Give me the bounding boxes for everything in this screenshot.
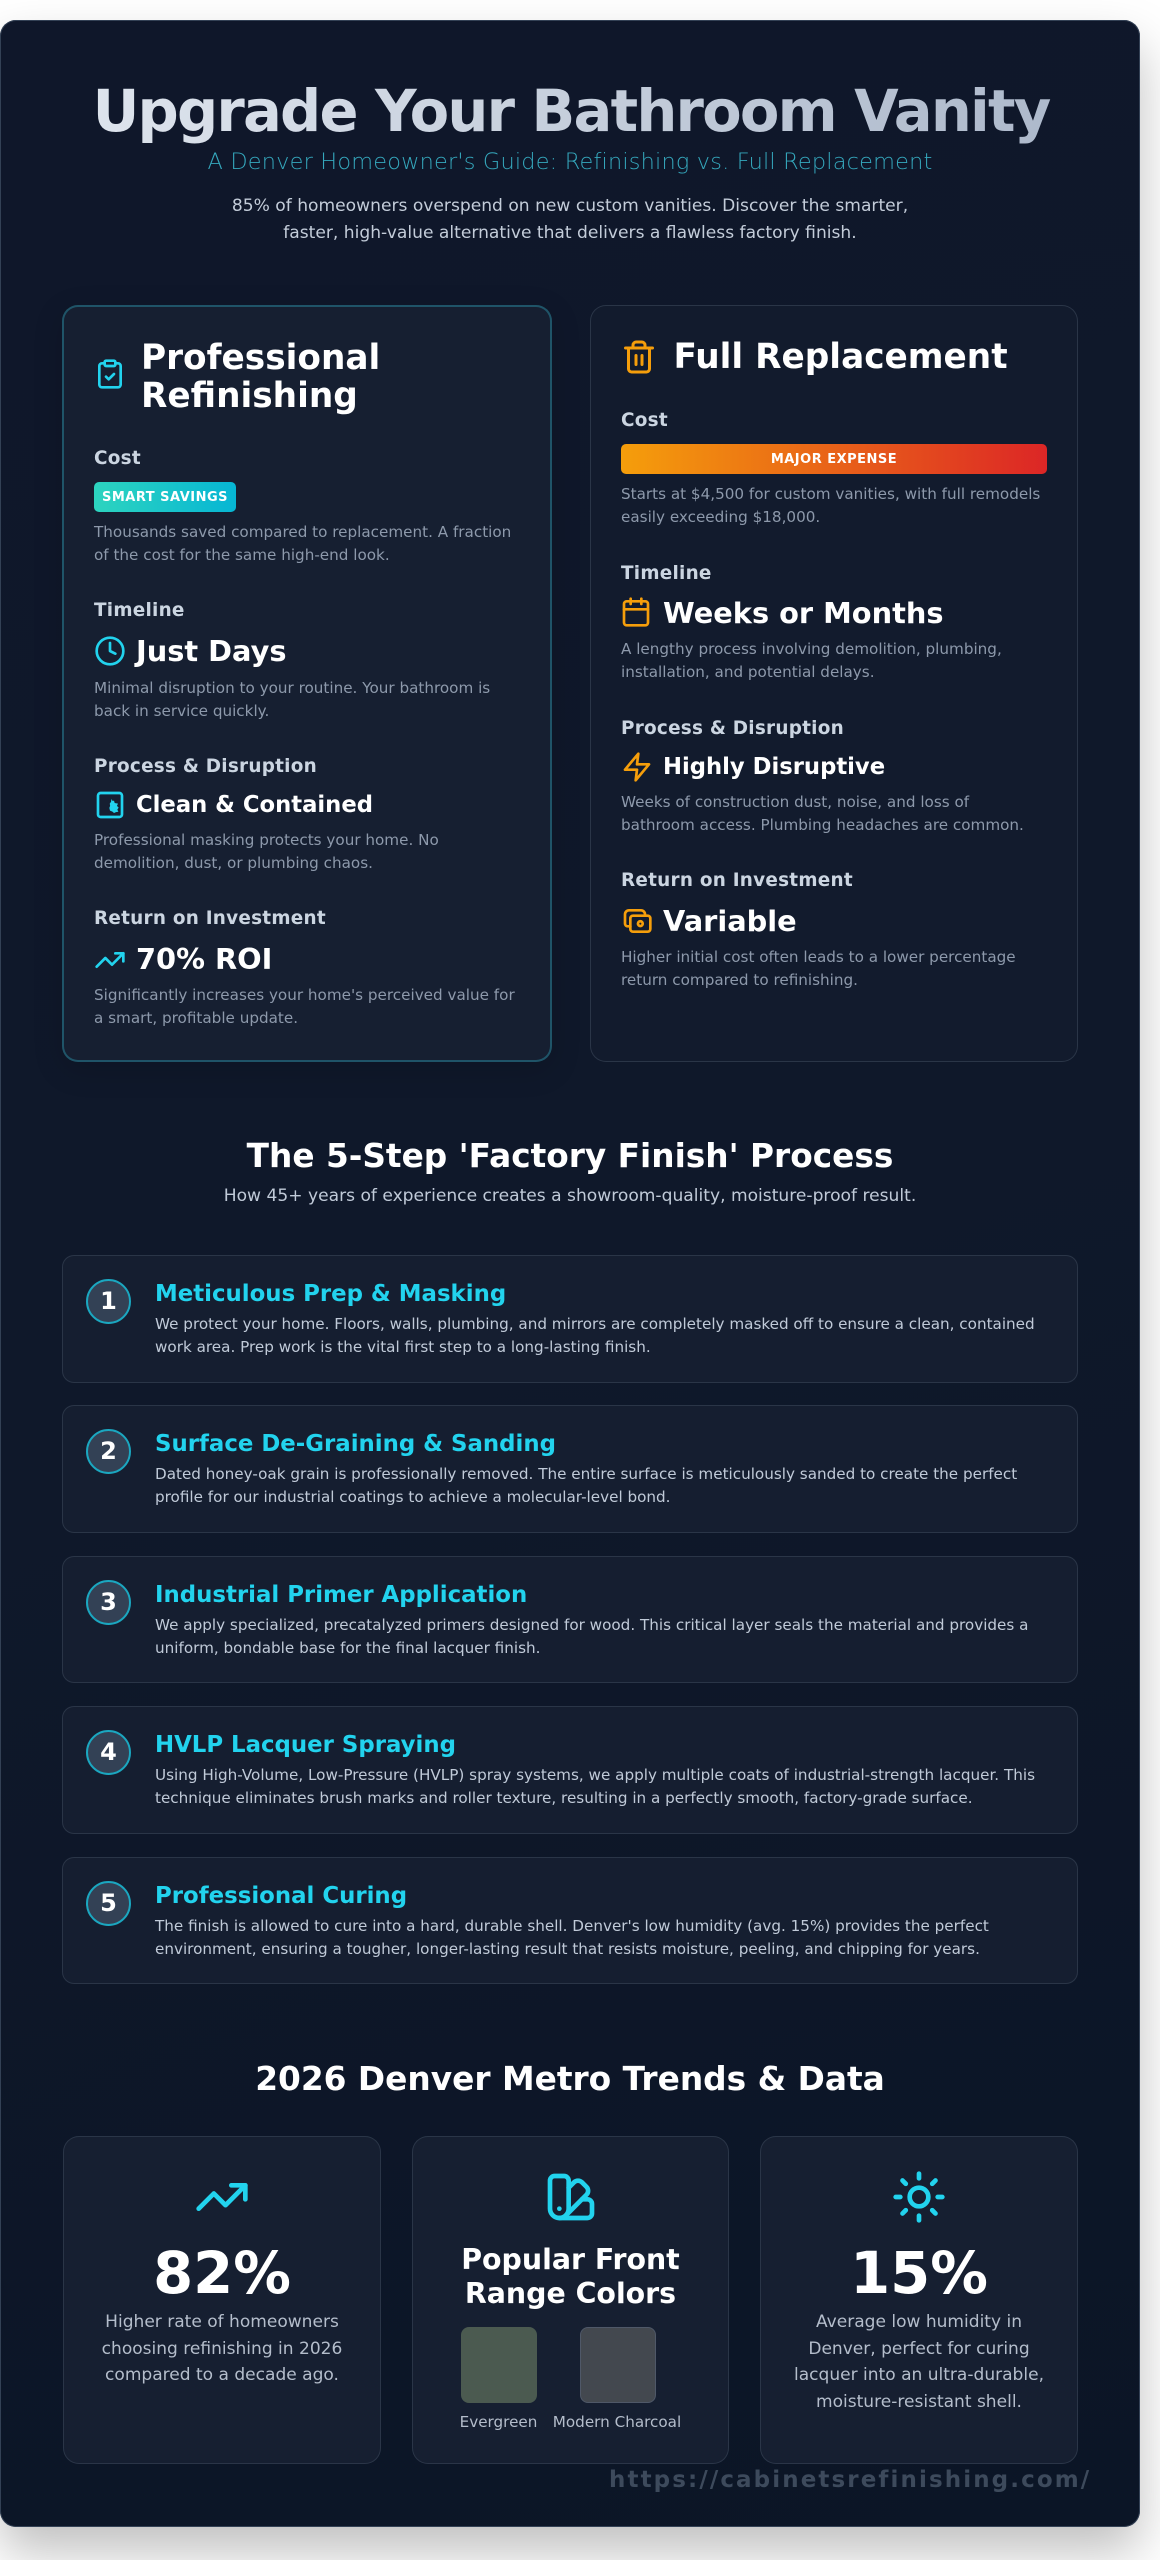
bar: major expense: MAJOR EXPENSE: [771, 452, 897, 467]
process description: Professional masking protects your home. No: [94, 830, 439, 848]
process description: Weeks of construction dust, noise, and loss of: [621, 792, 969, 810]
number badge: [86, 1279, 131, 1324]
cost description: [94, 522, 511, 564]
label: process: Process & Disruption: [621, 718, 844, 738]
intro text: [232, 196, 908, 243]
stat description: lacquer into an ultra-durable,: [794, 2365, 1044, 2385]
stat description: Higher rate of homeowners: [105, 2312, 339, 2332]
step description: [155, 1315, 1035, 1356]
roi description: [621, 948, 1016, 989]
stat description: moisture-resistant shell.: [816, 2392, 1022, 2412]
panel: professional refinishing: [62, 305, 552, 1062]
section heading: trends: 2026 Denver Metro Trends & Data: [255, 2060, 885, 2098]
number badge: [86, 1580, 131, 1625]
step description: uniform, bondable base for the final lacquer finish.: [155, 1639, 540, 1657]
stat number: 82%: [153, 2240, 291, 2307]
heading: Refinishing: [141, 376, 358, 416]
roi description: a smart, profitable update.: [94, 1009, 298, 1027]
icon: calendar: [622, 597, 650, 627]
stat number: 15%: [850, 2240, 988, 2307]
roi description: return compared to refinishing.: [621, 971, 858, 989]
timeline description: installation, and potential delays.: [621, 663, 875, 681]
stat description: Denver, perfect for curing: [808, 2339, 1030, 2359]
section heading: process: [224, 1137, 916, 1206]
step description: We protect your home. Floors, walls, plumbing, and mirrors are completely masked off to ensure a clean, contained: [155, 1315, 1035, 1333]
step description: [155, 1465, 1017, 1506]
timeline description: back in service quickly.: [94, 702, 269, 720]
step description: We apply specialized, precatalyzed primers designed for wood. This critical layer seals the material and provides a: [155, 1616, 1028, 1634]
website url: https://cabinetsrefinishing.com/: [609, 2467, 1091, 2493]
timeline description: Minimal disruption to your routine. Your bathroom is: [94, 678, 490, 696]
stat card: 15%: [760, 2136, 1078, 2464]
label: cost: Cost: [94, 448, 141, 468]
panel: full replacement: [590, 305, 1078, 1062]
step description: profile for our industrial coatings to achieve a molecular-level bond.: [155, 1488, 671, 1506]
label: roi: Return on Investment: [94, 908, 326, 928]
value: weeks or months: Weeks or Months: [663, 596, 943, 630]
intro text: 85% of homeowners overspend on new custom vanities. Discover the smarter,: [232, 196, 908, 216]
heading: Full Replacement: [674, 337, 1008, 377]
step title: Surface De-Graining & Sanding: [155, 1431, 556, 1457]
colors heading: Popular Front: [461, 2243, 680, 2276]
swatch label: modern charcoal: Modern Charcoal: [553, 2413, 681, 2431]
step description: Using High-Volume, Low-Pressure (HVLP) spray systems, we apply multiple coats of industrial-strength lacquer. This: [155, 1766, 1035, 1784]
label: process: Process & Disruption: [94, 756, 317, 776]
process description: [621, 792, 1024, 834]
heading: [141, 338, 380, 416]
value: just days: Just Days: [136, 634, 287, 668]
timeline description: [94, 678, 490, 720]
icon: banknotes: [624, 909, 652, 933]
number badge: 3: [100, 1588, 117, 1616]
step title: Professional Curing: [155, 1883, 407, 1909]
roi description: [94, 986, 515, 1027]
stat card: colors: [412, 2136, 729, 2464]
stat description: Average low humidity in: [816, 2312, 1022, 2332]
value: 70% roi: 70% ROI: [136, 942, 272, 976]
heading: Professional: [141, 338, 380, 378]
stat description: [102, 2312, 342, 2385]
label: timeline: Timeline: [94, 600, 185, 620]
step description: [155, 1766, 1035, 1807]
header: [93, 78, 1050, 243]
icon: trending up: [196, 2183, 248, 2211]
swatch label: evergreen: Evergreen: [460, 2413, 537, 2431]
stat description: choosing refinishing in 2026: [102, 2339, 342, 2359]
number badge: [86, 1730, 131, 1775]
bar: major expense: [621, 444, 1047, 474]
icon: clipboard check: [98, 359, 122, 389]
number badge: 5: [100, 1889, 117, 1917]
timeline description: A lengthy process involving demolition, plumbing,: [621, 640, 1002, 658]
process description: bathroom access. Plumbing headaches are common.: [621, 816, 1024, 834]
value: clean and contained: Clean & Contained: [136, 792, 373, 818]
label: timeline: Timeline: [621, 562, 712, 584]
step description: work area. Prep work is the vital first step to a long-lasting finish.: [155, 1338, 651, 1356]
cost description: of the cost for the same high-end look.: [94, 546, 390, 564]
step description: The finish is allowed to cure into a hard, durable shell. Denver's low humidity (avg. 15%) provides the perfect: [155, 1917, 989, 1935]
step 2: [62, 1405, 1078, 1533]
process description: demolition, dust, or plumbing chaos.: [94, 854, 373, 872]
colors heading: Range Colors: [465, 2277, 676, 2310]
cost description: Starts at $4,500 for custom vanities, with full remodels: [621, 484, 1040, 502]
cost description: Thousands saved compared to replacement. A fraction: [94, 522, 511, 540]
label: roi: Return on Investment: [621, 870, 853, 891]
icon: zap: [624, 752, 650, 782]
number badge: 4: [100, 1738, 117, 1766]
swatch: evergreen: [460, 2327, 536, 2403]
number badge: [86, 1429, 131, 1474]
intro text: faster, high-value alternative that delivers a flawless factory finish.: [283, 223, 857, 243]
step description: environment, ensuring a tougher, longer-lasting result that resists moisture, peeling, and chipping for years.: [155, 1940, 980, 1958]
cost description: easily exceeding $18,000.: [621, 508, 820, 526]
step description: [154, 1917, 989, 1958]
timeline description: [621, 640, 1002, 681]
value: highly disruptive: Highly Disruptive: [663, 754, 885, 780]
stat card: 82%: [63, 2136, 381, 2464]
icon: trash: [624, 340, 654, 374]
swatch: modern charcoal: [580, 2327, 656, 2403]
stat description: [794, 2312, 1044, 2412]
step 1: [62, 1255, 1078, 1383]
step description: [155, 1616, 1028, 1657]
colors heading: [461, 2243, 680, 2310]
cost description: [621, 484, 1040, 526]
title: Upgrade Your Bathroom Vanity: [93, 78, 1049, 145]
process description: [94, 830, 439, 872]
step 4: [62, 1706, 1078, 1834]
number badge: 1: [100, 1287, 117, 1315]
label: cost: Cost: [621, 410, 668, 430]
badge: smart savings: SMART SAVINGS: [102, 490, 228, 505]
step title: Meticulous Prep & Masking: [155, 1281, 506, 1307]
roi description: Significantly increases your home's perceived value for: [94, 986, 515, 1004]
process subtitle: How 45+ years of experience creates a showroom-quality, moisture-proof result.: [224, 1186, 916, 1206]
step description: Dated honey-oak grain is professionally removed. The entire surface is meticulously sanded to create the perfect: [155, 1465, 1017, 1483]
icon: sun: [893, 2171, 945, 2223]
step description: technique eliminates brush marks and roller texture, resulting in a perfectly smooth, factory-grade surface.: [155, 1789, 973, 1807]
process title: The 5-Step 'Factory Finish' Process: [247, 1137, 893, 1175]
value: variable: Variable: [663, 904, 797, 938]
step 3: [62, 1556, 1078, 1683]
icon: swatch book: [548, 2174, 594, 2220]
roi description: Higher initial cost often leads to a lower percentage: [621, 948, 1016, 966]
badge: smart savings: [94, 482, 236, 512]
number badge: [86, 1881, 131, 1926]
stat description: compared to a decade ago.: [105, 2365, 339, 2385]
number badge: 2: [100, 1437, 117, 1465]
subtitle: A Denver Homeowner's Guide: Refinishing vs. Full Replacement: [208, 149, 932, 175]
icon: clean square: [96, 792, 124, 818]
icon: trending up: [95, 952, 125, 968]
step 5: [62, 1857, 1078, 1984]
step title: Industrial Primer Application: [155, 1582, 527, 1608]
step title: HVLP Lacquer Spraying: [155, 1732, 456, 1758]
icon: clock: [95, 636, 125, 666]
